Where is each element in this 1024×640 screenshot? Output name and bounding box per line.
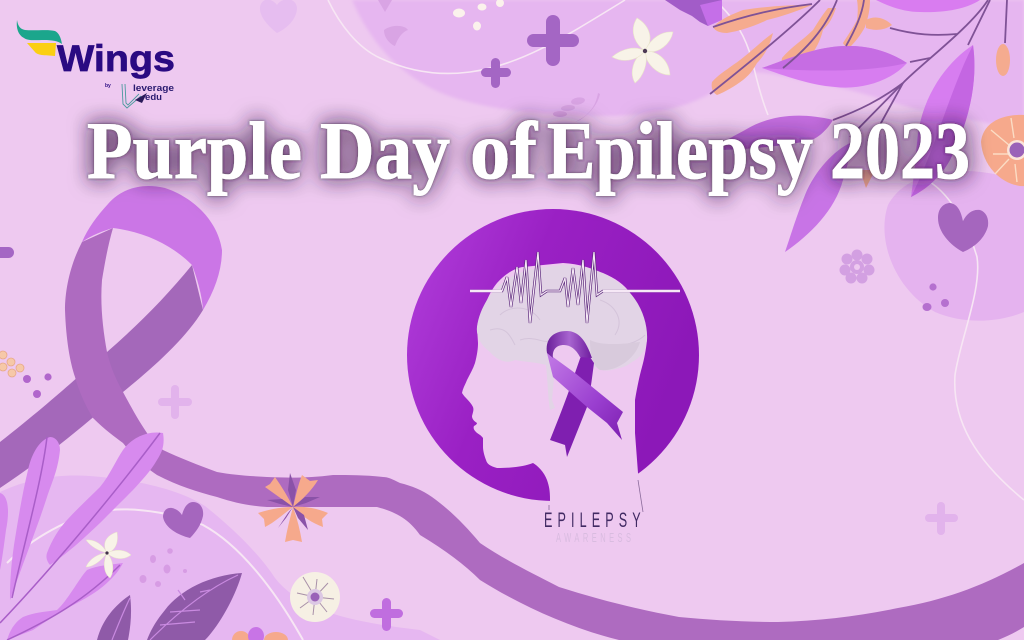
rocket mark — [135, 93, 147, 103]
title: 2023 — [830, 105, 970, 196]
title: Epilepsy — [547, 105, 813, 196]
dark leaves bottom — [97, 573, 242, 640]
orange leaves branch — [712, 0, 1010, 188]
by label: by — [105, 83, 111, 89]
title: of — [470, 105, 539, 196]
dots bottom-left — [140, 548, 187, 587]
ribbon: main band — [65, 228, 1024, 640]
purple leaves right — [710, 45, 974, 252]
edu text: edu — [145, 92, 162, 102]
title: Purple — [87, 105, 302, 196]
pale heart — [260, 0, 297, 33]
epilepsy label: EPILEPSY — [544, 508, 641, 532]
wings logo — [17, 20, 175, 108]
awareness label: AWARENESS — [556, 532, 631, 546]
ecg trace — [470, 252, 680, 323]
plus bottom — [370, 598, 403, 631]
thin neck lines — [549, 480, 643, 512]
white dots — [453, 0, 504, 30]
leverage text: leverage — [133, 83, 174, 93]
purple disc — [407, 209, 699, 501]
white star flower bottom-left — [86, 532, 131, 578]
faint sprig top — [378, 0, 600, 122]
epilepsy emblem — [407, 209, 699, 546]
white star flower top — [612, 18, 673, 83]
dark purple flower top — [665, 0, 722, 26]
heart right — [938, 203, 988, 252]
brain — [477, 265, 647, 410]
pale flower — [840, 250, 874, 284]
bottom-left leaves — [0, 432, 164, 640]
heart bottom-left — [163, 502, 203, 538]
title: Day — [320, 105, 450, 196]
purple dots left — [23, 373, 52, 398]
ribbon: top loop — [82, 186, 222, 310]
stems — [710, 0, 1007, 143]
logo swoosh — [17, 20, 62, 56]
wordmark: Wings — [57, 38, 175, 79]
orange flower right — [981, 115, 1024, 186]
head silhouette — [462, 263, 647, 517]
orange flower bottom edge — [232, 627, 288, 640]
plus icons — [0, 15, 579, 258]
purple top band — [876, 0, 980, 12]
leverage mark — [122, 84, 141, 108]
pale plus icons — [158, 385, 958, 535]
white round flower — [290, 572, 340, 622]
orange berries left — [0, 351, 24, 377]
title — [87, 105, 970, 196]
dots right — [922, 283, 949, 311]
orange flower on band — [258, 473, 328, 542]
ribbon: cross strand — [0, 265, 203, 488]
awareness ribbon — [547, 331, 623, 457]
